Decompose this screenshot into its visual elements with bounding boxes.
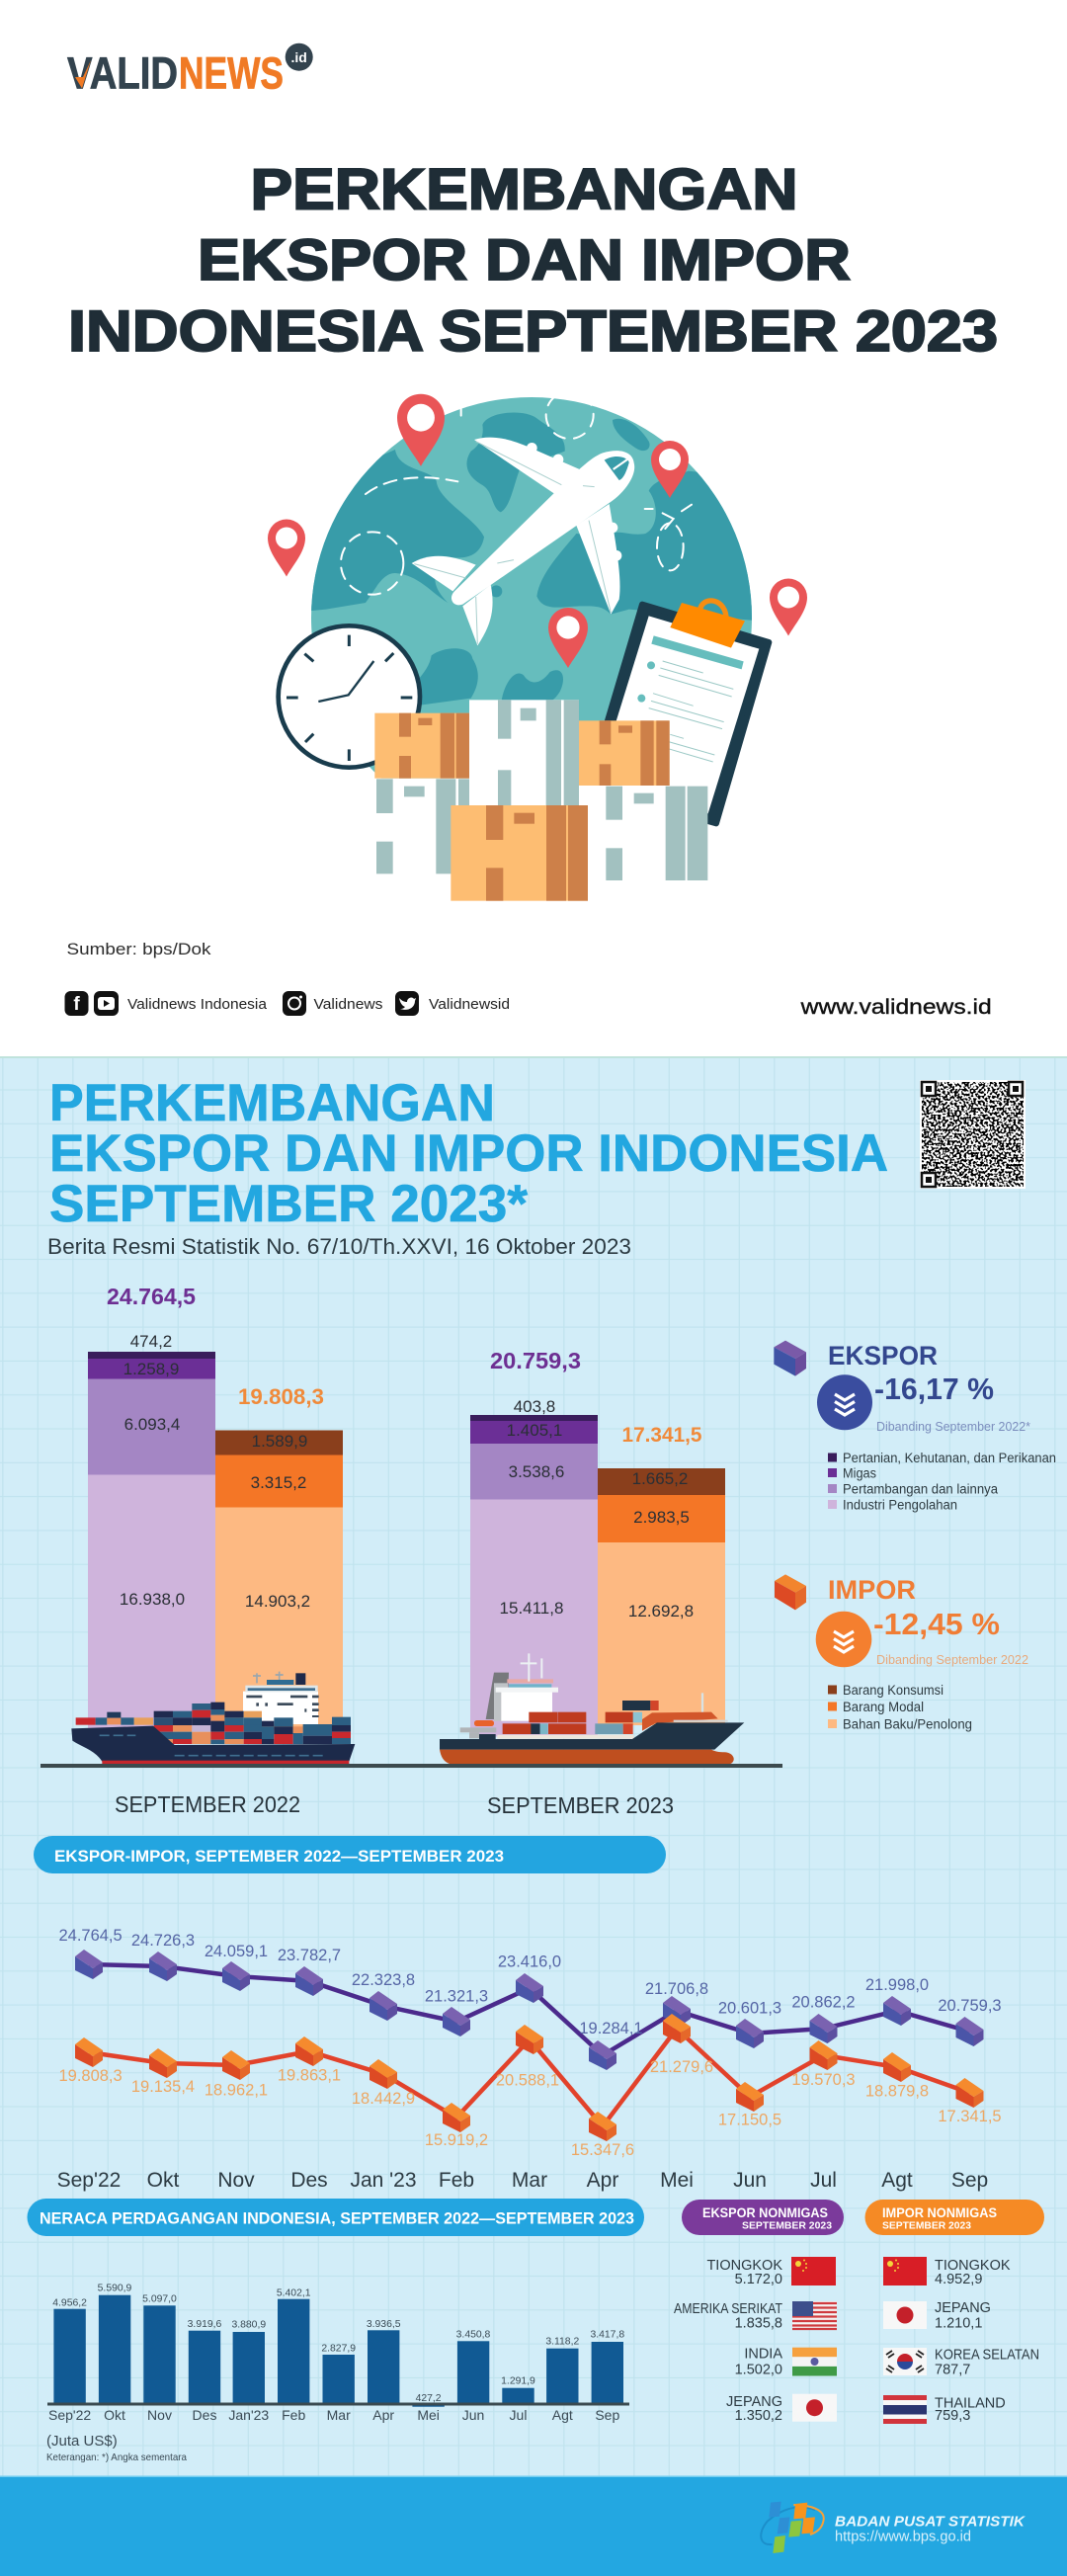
ship: container ship 2022	[71, 1672, 355, 1766]
month axis: Des	[290, 2169, 328, 2192]
panel: ekspor summary: Dibanding September 2022*	[876, 1419, 1030, 1434]
list: ekspor nonmigas by country: TIONGKOK	[706, 2258, 782, 2274]
nodes: impor	[75, 2014, 984, 2141]
pill: impor nonmigas	[865, 2200, 1044, 2235]
social media row: Validnews Indonesia	[127, 997, 268, 1013]
title: PERKEMBANGAN	[251, 158, 798, 222]
month axis	[57, 2169, 988, 2192]
ground line	[41, 1764, 782, 1768]
bar values: 1.589,9	[252, 1432, 307, 1451]
bar values: 5.402,1	[277, 2287, 311, 2298]
bar chart: neraca perdagangan	[46, 2284, 629, 2463]
bar values: 15.411,8	[500, 1599, 563, 1618]
values: impor: 19.570,3	[791, 2071, 856, 2089]
legend: ekspor: Pertambangan dan lainnya	[843, 1482, 998, 1496]
line: ekspor	[89, 1964, 970, 2055]
bar values: 3.417,8	[590, 2330, 624, 2341]
icon: instagram	[283, 991, 306, 1016]
bar values: 403,8	[514, 1397, 555, 1416]
values: impor: 19.863,1	[278, 2067, 341, 2085]
icon: ekspor container	[774, 1341, 806, 1376]
pill: ekspor nonmigas: SEPTEMBER 2023	[742, 2221, 832, 2232]
values: impor: 15.347,6	[571, 2141, 634, 2159]
axis line	[47, 2403, 629, 2405]
footer band	[0, 2476, 1067, 2576]
list: impor nonmigas by country: 787,7	[935, 2363, 970, 2378]
values: impor: 18.879,8	[865, 2083, 929, 2101]
bar values: 3.936,5	[367, 2319, 401, 2330]
bar values: 12.692,8	[628, 1602, 694, 1620]
bars	[53, 2295, 623, 2407]
flag: China	[791, 2257, 836, 2285]
panel: BPS infographic background	[0, 1056, 1067, 2477]
values: ekspor: 21.321,3	[425, 1988, 488, 2006]
heading: blue infographic title	[49, 1074, 888, 1233]
icon: BPS logo	[761, 2502, 824, 2553]
values: ekspor: 22.323,8	[352, 1971, 415, 1989]
flag: Japan	[883, 2301, 927, 2329]
source credit: Sumber: bps/Dok	[67, 940, 211, 958]
month labels: Mei	[417, 2407, 440, 2423]
panel: ekspor summary: EKSPOR	[828, 1341, 938, 1371]
month labels: Jan'23	[228, 2407, 269, 2423]
list: impor nonmigas by country: KOREA SELATAN	[935, 2347, 1039, 2363]
page background	[0, 0, 1067, 1057]
legend: ekspor: Migas	[843, 1466, 876, 1480]
month axis: Jun	[733, 2169, 767, 2192]
panel: ekspor summary: -16,17 %	[874, 1371, 994, 1406]
bar values: 3.538,6	[509, 1462, 564, 1481]
values: ekspor: 24.764,5	[58, 1927, 123, 1945]
legend: impor: Bahan Baku/Penolong	[843, 1717, 972, 1731]
stacked bar chart: Sep 2022 vs Sep 2023	[41, 1284, 782, 1818]
bar values: 3.880,9	[231, 2320, 266, 2331]
list: ekspor nonmigas by country: 1.502,0	[735, 2363, 782, 2378]
bar values: 16.938,0	[120, 1590, 185, 1609]
bar: ekspor 2022	[88, 1352, 215, 1729]
month labels: Agt	[552, 2407, 573, 2423]
section pill: ekspor-impor: EKSPOR-IMPOR, SEPTEMBER 2022—SEPTEMBER 2023	[54, 1847, 504, 1866]
bar values: 1.665,2	[632, 1469, 688, 1488]
list: impor nonmigas by country: THAILAND	[935, 2396, 1006, 2412]
month labels: Nov	[147, 2407, 172, 2423]
pill: ekspor nonmigas	[682, 2200, 844, 2235]
icon: twitter	[395, 991, 419, 1016]
month labels: Mar	[327, 2407, 351, 2423]
section pill: ekspor-impor	[34, 1836, 666, 1873]
month axis: Jan '23	[350, 2169, 417, 2192]
axis label: September 2022: SEPTEMBER 2022	[115, 1791, 300, 1817]
values: impor: 17.341,5	[938, 2108, 1002, 2125]
bar values	[52, 2284, 624, 2404]
bar values: 5.590,9	[98, 2284, 132, 2294]
values: ekspor: 20.862,2	[791, 1994, 856, 2012]
list: impor nonmigas by country: TIONGKOK	[935, 2258, 1011, 2274]
values: ekspor: 21.706,8	[645, 1980, 708, 1998]
panel: impor summary: Dibanding September 2022	[876, 1652, 1028, 1667]
legend: impor: Barang Konsumsi	[843, 1683, 944, 1698]
axis label: September 2023: SEPTEMBER 2023	[487, 1792, 674, 1818]
legend: ekspor	[828, 1451, 1056, 1512]
legend: ekspor: Pertanian, Kehutanan, dan Perikanan	[843, 1451, 1056, 1465]
bar values: 427,2	[416, 2393, 442, 2404]
website url: www.validnews.id	[800, 996, 992, 1019]
month labels: Apr	[372, 2407, 394, 2423]
bar values: 3.118,2	[545, 2337, 579, 2348]
month labels: Sep	[595, 2407, 619, 2423]
values: ekspor: 20.759,3	[938, 1997, 1002, 2015]
list: ekspor nonmigas by country: INDIA	[744, 2347, 782, 2363]
values: ekspor: 21.998,0	[865, 1976, 929, 1994]
heading: blue infographic title: EKSPOR DAN IMPOR INDONESIA	[49, 1124, 888, 1183]
bar: ekspor 2023	[470, 1415, 598, 1737]
bar values: 17.341,5	[622, 1423, 702, 1447]
values: ekspor: 24.059,1	[205, 1943, 268, 1960]
legend: impor: Barang Modal	[843, 1700, 924, 1714]
clipboard	[588, 601, 769, 823]
bar values: 20.759,3	[490, 1348, 581, 1373]
month axis: Okt	[147, 2169, 179, 2192]
list: impor nonmigas by country: JEPANG	[935, 2300, 991, 2316]
month axis: Jul	[810, 2169, 837, 2192]
list: impor nonmigas by country: 4.952,9	[935, 2272, 982, 2287]
title: INDONESIA SEPTEMBER 2023	[68, 299, 998, 364]
values: impor: 18.442,9	[352, 2090, 415, 2108]
values: ekspor: 23.416,0	[498, 1953, 561, 1971]
flag: Japan	[792, 2394, 837, 2422]
QR code	[920, 1080, 1026, 1189]
legend: ekspor: Industri Pengolahan	[843, 1498, 957, 1512]
clock	[279, 625, 420, 768]
list: ekspor nonmigas by country	[674, 2257, 837, 2424]
values: impor: 17.150,5	[718, 2112, 781, 2129]
icon: youtube	[94, 991, 119, 1016]
globe	[311, 397, 752, 779]
social media row: Validnewsid	[429, 997, 510, 1013]
cardboard boxes	[374, 700, 707, 901]
list: ekspor nonmigas by country: 1.835,8	[735, 2316, 782, 2332]
month axis: Feb	[439, 2169, 474, 2192]
bar values: 3.315,2	[251, 1473, 306, 1492]
month axis: Apr	[587, 2169, 618, 2192]
logo: Validnews: VALID	[67, 47, 178, 98]
nodes: ekspor	[75, 1950, 984, 2070]
section pill: neraca perdagangan: NERACA PERDAGANGAN INDONESIA, SEPTEMBER 2022—SEPTEMBER 2023	[40, 2209, 634, 2228]
list: ekspor nonmigas by country: JEPANG	[726, 2394, 782, 2410]
plane	[412, 438, 634, 645]
panel: impor summary: IMPOR	[828, 1575, 916, 1605]
title	[68, 158, 998, 364]
month labels: Feb	[282, 2407, 305, 2423]
logo: Validnews: NEWS	[179, 47, 284, 98]
month axis: Sep	[951, 2169, 988, 2192]
month labels: Jul	[510, 2407, 527, 2423]
bar values: 1.258,9	[123, 1360, 179, 1378]
flag: South Korea	[883, 2348, 927, 2375]
social media row: Validnews	[314, 997, 383, 1013]
flag: China	[883, 2257, 927, 2285]
values: impor: 19.808,3	[58, 2067, 123, 2085]
section pill: neraca perdagangan	[28, 2199, 644, 2236]
bar values: 4.956,2	[52, 2297, 87, 2308]
list: ekspor nonmigas by country: 1.350,2	[735, 2408, 782, 2424]
icon: facebook: f	[73, 994, 80, 1015]
values: ekspor	[58, 1927, 1002, 2037]
unit note: (Juta US$)	[46, 2433, 118, 2450]
panel: ekspor summary	[774, 1341, 1056, 1512]
month labels: Jun	[462, 2407, 484, 2423]
values: ekspor: 20.601,3	[718, 2000, 781, 2018]
icon: impor container	[775, 1574, 806, 1610]
bar values	[107, 1284, 702, 1620]
month axis: Agt	[881, 2169, 913, 2192]
line chart: ekspor-impor monthly	[57, 1927, 1002, 2192]
month axis: Mei	[660, 2169, 694, 2192]
values: impor: 18.962,1	[205, 2082, 268, 2100]
title: EKSPOR DAN IMPOR	[198, 228, 851, 292]
month labels	[48, 2407, 619, 2423]
bar values: 1.405,1	[507, 1421, 562, 1440]
month labels: Des	[193, 2407, 216, 2423]
month axis: Nov	[217, 2169, 255, 2192]
illustration: globe, plane, pins, clock, clipboard, boxes	[268, 391, 807, 901]
pill: ekspor nonmigas: EKSPOR NONMIGAS	[702, 2204, 828, 2220]
icon: facebook	[65, 991, 89, 1016]
month labels: Sep'22	[48, 2407, 91, 2423]
agency website: https://www.bps.go.id	[835, 2529, 971, 2545]
values: impor: 19.135,4	[131, 2078, 195, 2096]
icon: down chevrons	[817, 1374, 872, 1430]
flag: Thailand	[883, 2395, 927, 2424]
bar values: 6.093,4	[124, 1415, 180, 1434]
values: impor: 21.279,6	[650, 2058, 713, 2076]
agency name: BADAN PUSAT STATISTIK	[835, 2514, 1026, 2531]
route dashes	[341, 391, 692, 595]
pill: impor nonmigas: IMPOR NONMIGAS	[882, 2204, 997, 2220]
bar values: 3.919,6	[188, 2319, 222, 2330]
bar values: 14.903,2	[245, 1592, 310, 1611]
month axis: Sep'22	[57, 2169, 121, 2192]
social media row	[65, 991, 510, 1016]
list: impor nonmigas by country: 759,3	[935, 2408, 970, 2424]
pill: impor nonmigas: SEPTEMBER 2023	[882, 2221, 971, 2232]
values: impor: 15.919,2	[425, 2131, 488, 2149]
list: ekspor nonmigas by country: 5.172,0	[735, 2272, 782, 2287]
bar values: 474,2	[130, 1332, 172, 1351]
heading: blue infographic title: SEPTEMBER 2023*	[49, 1175, 528, 1233]
location pins	[397, 394, 445, 466]
values: impor: 20.588,1	[496, 2072, 559, 2090]
values: ekspor: 24.726,3	[131, 1932, 195, 1950]
bar: impor 2023	[598, 1468, 725, 1725]
values: ekspor: 19.284,1	[579, 2020, 643, 2037]
bar values: 2.983,5	[633, 1508, 690, 1527]
ship: cargo ship 2023	[440, 1653, 744, 1765]
legend: impor	[828, 1683, 972, 1731]
bar values: 24.764,5	[107, 1284, 196, 1309]
bar values: 5.097,0	[142, 2294, 177, 2305]
bar values: 19.808,3	[238, 1384, 324, 1409]
list: ekspor nonmigas by country: AMERIKA SERIKAT	[674, 2301, 782, 2317]
bar: impor 2022	[215, 1431, 343, 1729]
list: impor nonmigas by country: 1.210,1	[935, 2316, 982, 2332]
heading: blue infographic title: PERKEMBANGAN	[49, 1074, 495, 1132]
bar values: 1.291,9	[501, 2376, 535, 2387]
subtitle: Berita Resmi Statistik No. 67/10/Th.XXVI, 16 Oktober 2023	[47, 1234, 631, 1259]
line: impor	[89, 2029, 970, 2126]
flag: USA	[792, 2301, 837, 2330]
icon: down chevrons	[816, 1612, 871, 1667]
values: impor	[58, 2058, 1002, 2159]
month axis: Mar	[512, 2169, 547, 2192]
flag: India	[792, 2348, 837, 2375]
footnote: Keterangan: *) Angka sementara	[46, 2451, 187, 2463]
logo: Validnews	[67, 43, 313, 98]
bar values: 3.450,8	[456, 2330, 491, 2341]
logo: Validnews: .id	[291, 49, 307, 65]
panel: impor summary: -12,45 %	[873, 1607, 1000, 1641]
month labels: Okt	[104, 2407, 125, 2423]
list: impor nonmigas by country	[883, 2257, 1039, 2424]
bar values: 2.827,9	[321, 2344, 356, 2355]
panel: impor summary	[775, 1574, 1028, 1731]
values: ekspor: 23.782,7	[278, 1947, 341, 1964]
